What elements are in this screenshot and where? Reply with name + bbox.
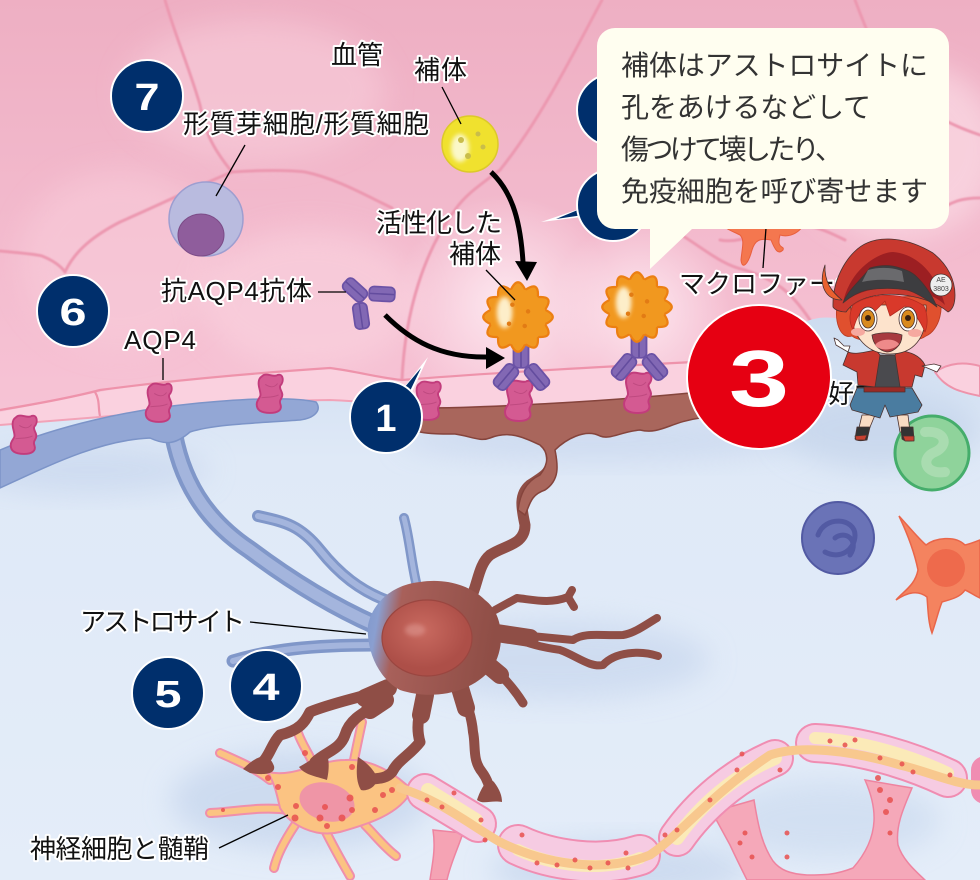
brown end-foot on vessel — [420, 392, 700, 515]
astrocyte body — [368, 581, 501, 695]
label: anti-AQP4 antibody: 抗AQP4抗体 — [161, 276, 312, 306]
hidden badge lower — [541, 169, 649, 241]
arrow: antibody binding — [385, 315, 505, 369]
lymphocyte purple — [802, 502, 874, 574]
antenna hair — [822, 265, 842, 300]
legs and shoes — [855, 415, 914, 441]
red number badge 3: 3 — [729, 334, 789, 423]
body and jacket — [874, 355, 905, 388]
vessel background — [0, 0, 980, 430]
myelin sheaths — [400, 738, 980, 866]
label: activated complement line 2: 補体 — [449, 239, 501, 269]
hat — [833, 239, 955, 312]
tongue — [875, 340, 899, 349]
myelin dots — [424, 738, 952, 870]
number badge 5: 5 — [154, 674, 182, 716]
label: activated complement: 活性化した — [376, 208, 502, 238]
number badge 5 — [132, 657, 204, 729]
label: AQP4: AQP4 — [124, 325, 196, 355]
number badge 1: 1 — [375, 398, 397, 440]
astrocyte nucleus — [382, 600, 472, 676]
number badge 7: 7 — [134, 77, 160, 119]
arrow: complement activation — [491, 172, 537, 281]
speech bubble: 補体はアストロサイトに — [621, 50, 928, 81]
cheeks — [851, 328, 865, 336]
label: neurons and myelin: 神経細胞と髄鞘 — [30, 834, 209, 864]
speech bubble: 傷つけて壊したり、 — [621, 134, 843, 165]
leader lines — [163, 87, 766, 848]
shorts — [850, 388, 922, 418]
hat badge: 3803 — [933, 286, 949, 293]
activated complement 2 — [602, 272, 672, 342]
character: red blood cell — [822, 239, 955, 441]
hat badge — [930, 274, 952, 296]
hat badge: AE — [936, 277, 946, 284]
red number badge 3 — [687, 305, 831, 449]
plasma cell — [169, 182, 243, 256]
astrocyte feet — [243, 755, 502, 802]
number badge 4 — [230, 650, 302, 722]
free anti-AQP4 antibody — [341, 276, 395, 330]
hair back — [836, 295, 941, 343]
neuron dendrites — [210, 722, 396, 876]
cap visor — [843, 266, 937, 307]
astrocyte — [0, 392, 700, 802]
endothelial band — [0, 362, 760, 425]
eyes — [859, 307, 917, 331]
vessel cell borders — [0, 0, 980, 380]
speech bubble — [597, 28, 949, 269]
speech bubble: 孔をあけるなどして — [621, 92, 871, 123]
neuron dots — [221, 750, 405, 829]
number badge 7 — [111, 60, 183, 132]
complement yellow — [442, 116, 498, 172]
label: complement: 補体 — [414, 55, 467, 85]
label: macrophage: マクロファージ — [679, 269, 860, 299]
fringe — [850, 295, 927, 332]
number badge 6: 6 — [60, 292, 86, 334]
label: blood vessel: 血管 — [331, 40, 383, 70]
connective branches — [712, 780, 925, 880]
axon — [400, 750, 980, 865]
face — [851, 305, 926, 354]
macrophage upper — [720, 220, 803, 265]
label: plasmablast / plasma cell: 形質芽細胞/形質細胞 — [183, 109, 429, 139]
number badge 1 — [350, 357, 428, 453]
neutrophil green — [895, 416, 969, 490]
antibodies bound — [492, 332, 669, 392]
hands — [834, 338, 850, 352]
label: neutrophil: 好中球 — [828, 379, 906, 409]
activated complement 1 — [483, 282, 553, 352]
hidden badge upper — [577, 74, 649, 146]
neuron body — [268, 760, 412, 833]
macrophage lower — [896, 516, 980, 633]
label: astrocyte: アストロサイト — [80, 607, 245, 637]
astrocyte blue processes — [172, 425, 418, 661]
number badge 4: 4 — [252, 667, 280, 709]
astrocyte brown processes — [255, 590, 658, 795]
number badge 6 — [37, 275, 109, 347]
brain tissue background — [0, 317, 980, 880]
speech bubble: 免疫細胞を呼び寄せます — [621, 176, 928, 207]
cheek right — [908, 329, 922, 337]
illustration: neuron and myelin — [210, 722, 980, 880]
astrocyte brown stem — [470, 445, 552, 600]
mouth — [872, 333, 902, 352]
AQP4 proteins — [11, 373, 651, 454]
astrocyte blue end-foot — [0, 399, 318, 488]
